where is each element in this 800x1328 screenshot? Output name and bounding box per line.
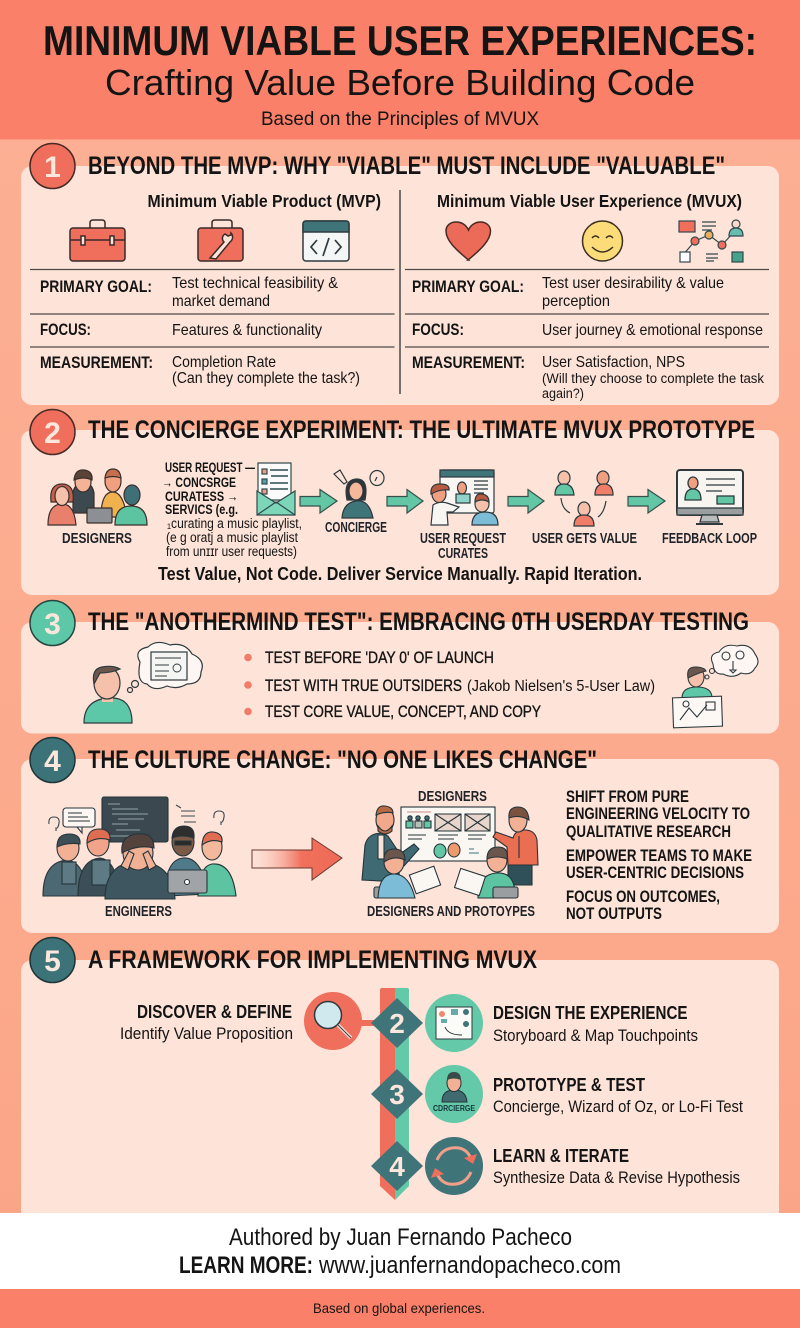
request description text: ₁curating a music playlist, bbox=[167, 516, 302, 531]
MVUX table: MEASUREMENT: bbox=[412, 353, 525, 372]
MVP table: market demand bbox=[172, 293, 270, 310]
MVUX table: User Satisfaction, NPS bbox=[542, 354, 685, 371]
flow labels: FEEDBACK LOOP bbox=[662, 531, 757, 547]
request description text: SERVICS (e.g. bbox=[165, 502, 238, 517]
step 2 text: DESIGN THE EXPERIENCE bbox=[493, 1003, 688, 1023]
step 1 text: Identify Value Proposition bbox=[120, 1025, 293, 1043]
subtitle: Crafting Value Before Building Code bbox=[105, 62, 695, 103]
request description text: from unɪɪr user requests) bbox=[166, 544, 297, 559]
request description text: USER REQUEST — bbox=[165, 460, 255, 475]
MVUX table: perception bbox=[542, 293, 610, 310]
panel: section 3 anothermind test bbox=[21, 600, 779, 734]
MVUX table bbox=[412, 275, 764, 401]
section 4 heading: THE CULTURE CHANGE: "NO ONE LIKES CHANGE" bbox=[88, 746, 597, 774]
icon: curating window bbox=[431, 470, 498, 525]
MVUX table: Test user desirability & value bbox=[542, 275, 724, 292]
icon: code window bbox=[303, 221, 349, 261]
MVP table: (Can they complete the task?) bbox=[172, 370, 360, 387]
section 1 number badge: 1 bbox=[44, 151, 61, 184]
section 5 number badge: 5 bbox=[44, 945, 61, 978]
step 3 text: PROTOTYPE & TEST bbox=[493, 1075, 645, 1095]
bullet list bbox=[244, 649, 655, 721]
takeaway list bbox=[566, 787, 752, 923]
icon: heart bbox=[446, 222, 490, 260]
designers label: DESIGNERS bbox=[418, 789, 487, 805]
footer note: Based on global experiences. bbox=[313, 1300, 485, 1316]
step 2 diamond: 2 bbox=[389, 1008, 405, 1039]
step 3 diamond: 3 bbox=[389, 1079, 405, 1110]
section 4 number badge bbox=[30, 738, 75, 782]
panel: section 1 comparison bbox=[21, 144, 779, 405]
takeaway list: NOT OUTPUTS bbox=[566, 904, 662, 923]
icon: feedback monitor bbox=[677, 470, 743, 524]
panel: section 4 culture change bbox=[21, 738, 779, 933]
icon: storyboard step 2 bbox=[425, 994, 483, 1052]
request description text: CURATESS → bbox=[165, 489, 238, 504]
icon: envelope with document bbox=[257, 463, 295, 515]
icon: iterate step 4 bbox=[425, 1137, 483, 1195]
curation labels bbox=[420, 531, 506, 562]
bullet list: (Jakob Nielsen's 5-User Law) bbox=[467, 678, 655, 695]
panel: section 2 concierge experiment bbox=[21, 410, 779, 595]
curation labels: USER REQUEST bbox=[420, 531, 506, 547]
section 5 number badge bbox=[30, 938, 75, 982]
request description text: → CONCSRGE bbox=[162, 475, 236, 490]
step 2 text bbox=[493, 1003, 698, 1045]
MVP table: PRIMARY GOAL: bbox=[40, 277, 152, 296]
flow labels: DESIGNERS bbox=[62, 531, 132, 547]
MVP table: Features & functionality bbox=[172, 322, 322, 339]
section 2 number badge bbox=[30, 410, 75, 454]
MVP table: FOCUS: bbox=[40, 320, 91, 339]
icon: toolbox with wrench bbox=[198, 220, 243, 261]
section 5 heading: A FRAMEWORK FOR IMPLEMENTING MVUX bbox=[88, 946, 537, 974]
designers and prototypes label: DESIGNERS AND PROTOYPES bbox=[367, 904, 535, 920]
learn more line bbox=[179, 1252, 621, 1279]
author band bbox=[0, 1213, 800, 1289]
takeaway list: QUALITATIVE RESEARCH bbox=[566, 822, 731, 841]
section 2 number badge: 2 bbox=[44, 417, 61, 450]
step 4 diamond: 4 bbox=[389, 1151, 405, 1182]
step 4 text bbox=[493, 1146, 740, 1187]
section 3 number badge bbox=[30, 600, 75, 646]
icon: concierge step 3: CDRCIERGE bbox=[433, 1104, 476, 1113]
MVUX table: PRIMARY GOAL: bbox=[412, 277, 524, 296]
MVUX table: FOCUS: bbox=[412, 320, 464, 339]
step 3 diamond bbox=[371, 1069, 423, 1119]
header band bbox=[0, 0, 800, 140]
icon: user gets value bbox=[555, 471, 613, 526]
section 4 number badge: 4 bbox=[44, 745, 61, 778]
takeaway list: EMPOWER TEAMS TO MAKE bbox=[566, 846, 752, 865]
tagline: Test Value, Not Code. Deliver Service Manually. Rapid Iteration. bbox=[158, 564, 642, 584]
step 4 diamond bbox=[371, 1141, 423, 1191]
step 4 text: LEARN & ITERATE bbox=[493, 1146, 629, 1166]
arrow to curation bbox=[387, 490, 423, 513]
icon: person holding a board bbox=[672, 645, 758, 728]
source line: Based on the Principles of MVUX bbox=[261, 108, 539, 130]
curation labels: CURATES bbox=[438, 546, 488, 562]
arrow to value bbox=[508, 490, 544, 513]
bullet list: TEST BEFORE 'DAY 0' OF LAUNCH bbox=[265, 649, 494, 667]
icon: smiley bbox=[582, 221, 622, 261]
timeline spine bbox=[355, 988, 409, 1200]
MVUX table: (Will they choose to complete the task bbox=[542, 371, 764, 386]
step 1 text: DISCOVER & DEFINE bbox=[137, 1002, 292, 1022]
icon: concierge step 3 bbox=[425, 1065, 483, 1123]
step 4 text: Synthesize Data & Revise Hypothesis bbox=[493, 1169, 740, 1187]
MVUX table: again?) bbox=[542, 386, 584, 401]
step 3 text: Concierge, Wizard of Oz, or Lo-Fi Test bbox=[493, 1098, 743, 1116]
illustration: designers with prototypes bbox=[362, 806, 538, 898]
MVUX table: User journey & emotional response bbox=[542, 322, 763, 339]
icon: toolbox bbox=[70, 220, 125, 261]
concierge label: CONCIERGE bbox=[325, 520, 387, 536]
MVP table: Test technical feasibility & bbox=[172, 275, 338, 292]
icon: magnifier step 1 bbox=[304, 992, 362, 1050]
bullet list: TEST WITH TRUE OUTSIDERS bbox=[265, 677, 462, 695]
step 3 text bbox=[493, 1075, 743, 1116]
icon: concierge bbox=[334, 470, 384, 518]
illustration: frustrated engineers bbox=[43, 797, 236, 899]
icon: designers group bbox=[48, 469, 147, 525]
MVP table: MEASUREMENT: bbox=[40, 353, 153, 372]
takeaway list: ENGINEERING VELOCITY TO bbox=[566, 804, 750, 823]
section 3 number badge: 3 bbox=[44, 608, 61, 641]
bullet list: TEST CORE VALUE, CONCEPT, AND COPY bbox=[265, 703, 541, 721]
author line: Authored by Juan Fernando Pacheco bbox=[229, 1224, 572, 1251]
takeaway list: USER-CENTRIC DECISIONS bbox=[566, 863, 744, 882]
learn more line: www.juanfernandopacheco.com bbox=[318, 1252, 621, 1279]
flow labels bbox=[62, 531, 757, 547]
section 1 number badge bbox=[30, 144, 75, 188]
step 1 text bbox=[120, 1002, 293, 1043]
icon: journey map bbox=[679, 220, 743, 262]
arrow to feedback bbox=[628, 490, 665, 513]
step 2 text: Storyboard & Map Touchpoints bbox=[493, 1027, 698, 1045]
takeaway list: SHIFT FROM PURE bbox=[566, 787, 689, 806]
arrow to concierge bbox=[300, 490, 337, 513]
request description text: (e g oratj a music playlist bbox=[166, 530, 298, 545]
MVUX column title: Minimum Viable User Experience (MVUX) bbox=[437, 191, 742, 211]
footer band bbox=[0, 1289, 800, 1328]
MVP table: Completion Rate bbox=[172, 354, 276, 371]
icon: person thinking about a document bbox=[84, 642, 202, 723]
MVP column title: Minimum Viable Product (MVP) bbox=[148, 191, 381, 211]
request description text bbox=[162, 460, 302, 559]
takeaway list: FOCUS ON OUTCOMES, bbox=[566, 887, 720, 906]
learn more line: LEARN MORE: bbox=[179, 1252, 313, 1279]
MVP table bbox=[40, 275, 360, 387]
engineers label: ENGINEERS bbox=[105, 904, 172, 920]
arrow: shift from engineers to designers bbox=[252, 838, 342, 880]
step 2 diamond bbox=[371, 998, 423, 1048]
value label: USER GETS VALUE bbox=[532, 531, 637, 547]
panel: section 5 framework bbox=[21, 938, 779, 1222]
